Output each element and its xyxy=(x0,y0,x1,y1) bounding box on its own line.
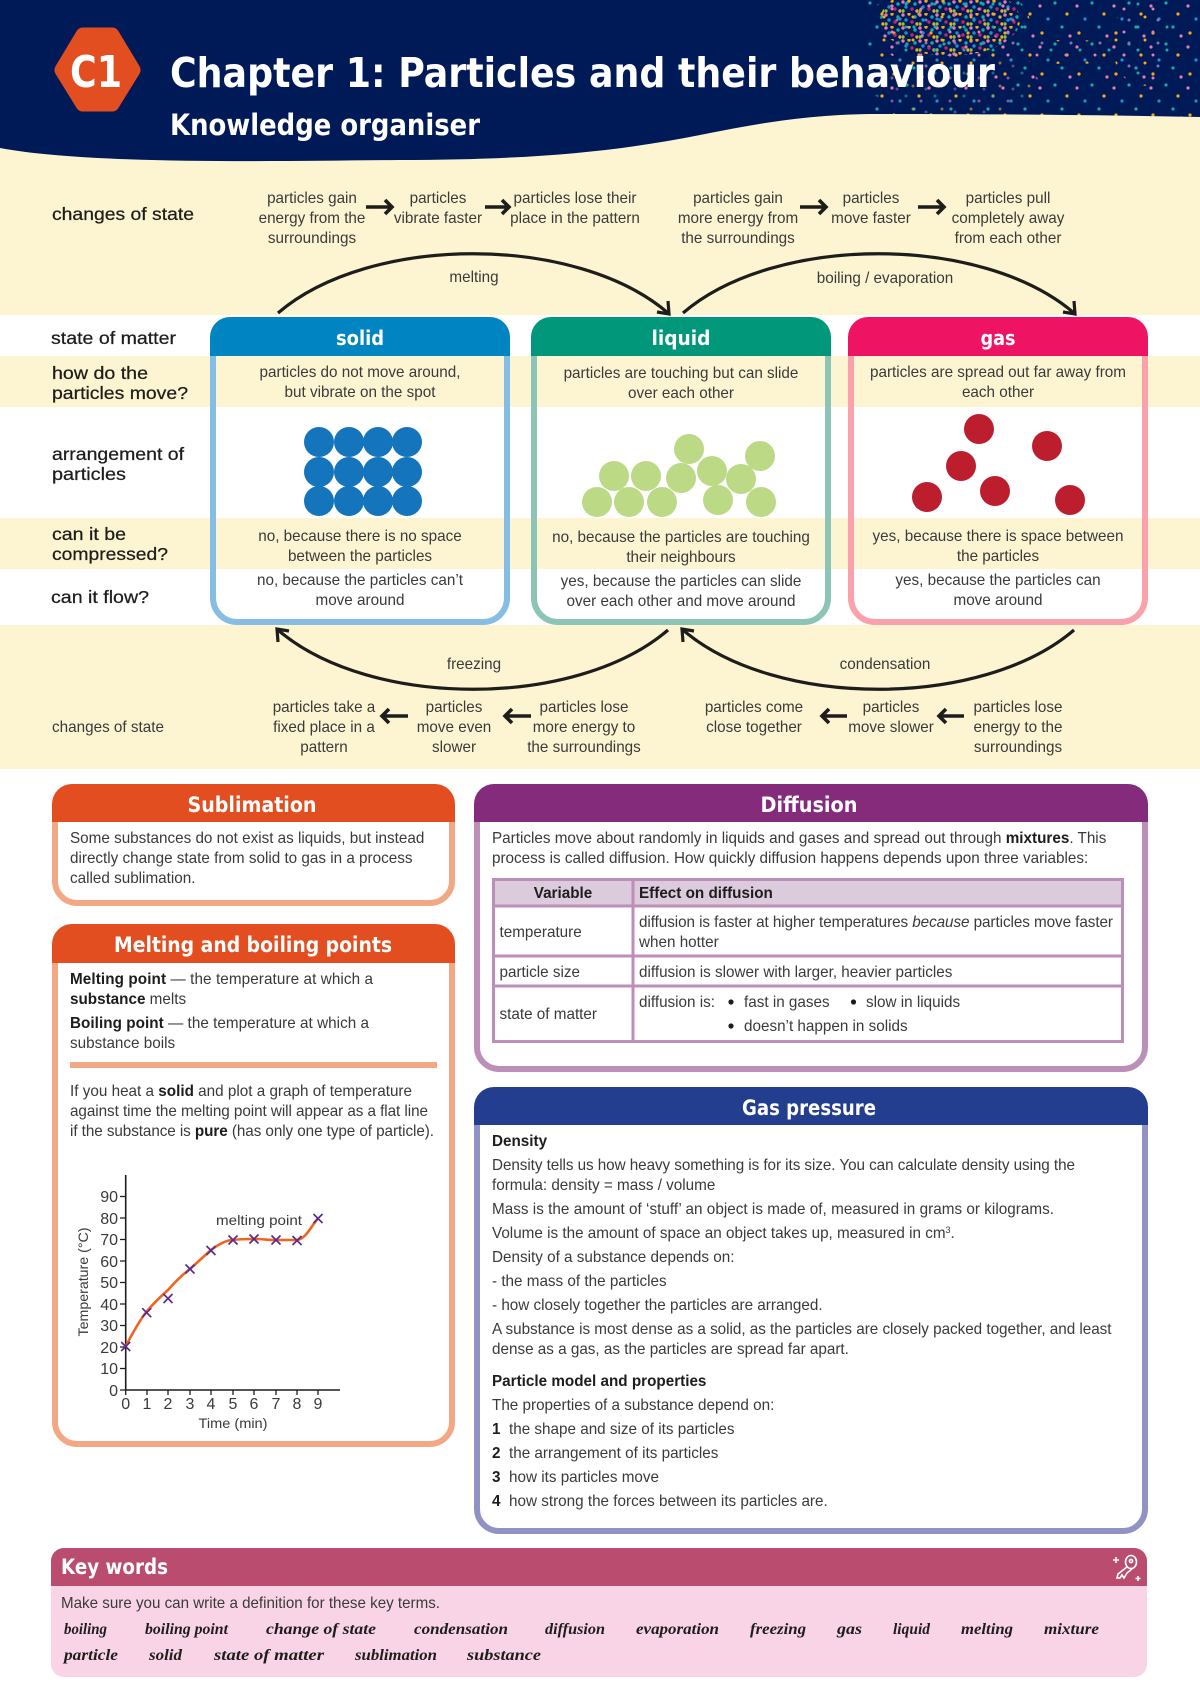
chapter badge C1: C1 xyxy=(70,47,122,98)
row labels: particles xyxy=(52,464,126,484)
key word list: freezing xyxy=(750,1621,806,1638)
panel: liquid xyxy=(531,317,831,622)
particle model text: 4 xyxy=(492,1493,501,1510)
panel: sublimation xyxy=(52,784,455,903)
heating process flow: particles xyxy=(843,190,900,207)
panel: solid: but vibrate on the spot xyxy=(285,384,436,401)
density text: - how closely together the particles are arranged. xyxy=(492,1297,823,1314)
density text: Density of a substance depends on: xyxy=(492,1249,734,1266)
density text: 3 xyxy=(946,1225,951,1235)
line chart: temperature against time: 40 xyxy=(100,1297,118,1314)
panel: gas pressure xyxy=(474,1087,1148,1531)
arrow: melting: melting xyxy=(449,269,499,286)
heating process flow: particles xyxy=(410,190,467,207)
cooling process flow: particles lose xyxy=(974,699,1062,716)
panel: gas: yes, because there is space between xyxy=(873,528,1123,545)
row labels: can it be xyxy=(52,524,126,544)
cooling process flow: fixed place in a xyxy=(273,719,375,736)
cooling process flow xyxy=(273,699,1063,756)
row label: changes of state: changes of state xyxy=(52,204,194,224)
heating process flow: place in the pattern xyxy=(510,210,640,227)
density text: Density tells us how heavy something is for its size. You can calculate density using the xyxy=(492,1157,1075,1174)
panel: gas: move around xyxy=(953,592,1043,609)
line chart: temperature against time: 50 xyxy=(100,1275,118,1292)
title: Chapter 1: Particles and their behaviour xyxy=(170,49,996,97)
panel: sublimation: directly change state from solid to gas in a process xyxy=(70,850,413,867)
particle model text: 1 xyxy=(492,1421,501,1438)
table: variables affecting diffusion: diffusion is: xyxy=(639,994,715,1011)
density text: formula: density = mass / volume xyxy=(492,1177,715,1194)
particle model text: the arrangement of its particles xyxy=(509,1445,719,1462)
line chart: temperature against time: 7 xyxy=(272,1396,281,1413)
definitions: Boiling point — the temperature at which a xyxy=(70,1015,370,1032)
row labels: compressed? xyxy=(52,544,168,564)
panel: key words xyxy=(51,1548,1147,1677)
panel: solid: solid xyxy=(336,326,384,350)
line chart: temperature against time: 8 xyxy=(293,1396,302,1413)
panel: gas: each other xyxy=(962,384,1034,401)
explanation text: if the substance is pure (has only one type of particle). xyxy=(70,1123,434,1140)
definitions: substance melts xyxy=(70,991,186,1008)
line chart: temperature against time: 3 xyxy=(186,1396,195,1413)
line chart: temperature against time: 60 xyxy=(100,1254,118,1271)
arrow: freezing xyxy=(277,629,668,689)
row labels: particles move? xyxy=(52,383,188,403)
particle model text: the shape and size of its particles xyxy=(509,1421,735,1438)
line chart: temperature against time: 1 xyxy=(143,1396,152,1413)
density text: A substance is most dense as a solid, as the particles are closely packed together, and least xyxy=(492,1321,1112,1338)
particle model text: how strong the forces between its particles are. xyxy=(509,1493,828,1510)
panel: gas: gas xyxy=(980,326,1016,350)
panel: solid: between the particles xyxy=(288,548,432,565)
key word list: change of state xyxy=(266,1621,376,1638)
line chart: temperature against time: Temperature (°C) xyxy=(75,1228,91,1336)
explanation text: If you heat a solid and plot a graph of temperature xyxy=(70,1083,412,1100)
table: variables affecting diffusion: Effect on diffusion xyxy=(639,885,773,902)
row label: changes of state (cooling): changes of state xyxy=(52,719,164,736)
arrow: boiling / evaporation xyxy=(683,254,1075,314)
table: variables affecting diffusion: doesn’t happen in solids xyxy=(744,1018,908,1035)
heating process flow: surroundings xyxy=(268,230,356,247)
panel: liquid: over each other xyxy=(628,385,734,402)
definitions: substance boils xyxy=(70,1035,175,1052)
key word list: boiling point xyxy=(145,1621,229,1638)
panel: gas: the particles xyxy=(957,548,1039,565)
panel: solid: move around xyxy=(315,592,405,609)
heating process flow: more energy from xyxy=(678,210,798,227)
panel: diffusion: Diffusion xyxy=(760,793,858,817)
heating process flow: move faster xyxy=(831,210,911,227)
particle model text: 2 xyxy=(492,1445,500,1462)
panel: solid: no, because there is no space xyxy=(258,528,462,545)
cooling process flow: move even xyxy=(417,719,491,736)
key word list: substance xyxy=(466,1647,541,1664)
table: variables affecting diffusion: fast in gases xyxy=(744,994,830,1011)
key word list: condensation xyxy=(414,1621,508,1638)
line chart: temperature against time: 2 xyxy=(164,1396,173,1413)
panel: sublimation: Some substances do not exist as liquids, but instead xyxy=(70,830,424,847)
heating process flow: vibrate faster xyxy=(394,210,482,227)
cooling process flow: particles lose xyxy=(540,699,628,716)
panel: liquid: yes, because the particles can slide xyxy=(561,573,801,590)
key word list: mixture xyxy=(1044,1621,1099,1638)
table: variables affecting diffusion: temperature xyxy=(500,924,582,941)
line chart: temperature against time: 0 xyxy=(121,1396,130,1413)
cooling process flow: particles take a xyxy=(273,699,376,716)
header banner xyxy=(0,0,1200,175)
panel: sublimation: called sublimation. xyxy=(70,870,195,887)
cooling process flow: particles xyxy=(863,699,920,716)
heating process flow: the surroundings xyxy=(681,230,795,247)
arrow: condensation: condensation xyxy=(840,656,930,673)
density text: Volume is the amount of space an object takes up, measured in cm xyxy=(492,1225,946,1242)
panel: gas: particles are spread out far away from xyxy=(870,364,1126,381)
table: variables affecting diffusion: particle size xyxy=(500,964,580,981)
line chart: temperature against time: 30 xyxy=(100,1318,118,1335)
panel: gas xyxy=(848,317,1148,622)
key word list: gas xyxy=(836,1621,862,1638)
heating process flow: energy from the xyxy=(259,210,365,227)
cream background bands xyxy=(0,114,1200,769)
arrow: boiling / evaporation: boiling / evaporation xyxy=(817,270,953,287)
line chart: temperature against time: 0 xyxy=(109,1383,118,1400)
arrow: melting xyxy=(278,254,669,314)
definitions xyxy=(70,971,374,1052)
key word list: boiling xyxy=(64,1621,107,1638)
cooling process flow: more energy to xyxy=(533,719,635,736)
explanation text xyxy=(70,1083,434,1140)
definitions: Melting point — the temperature at which a xyxy=(70,971,374,988)
key word list: solid xyxy=(148,1647,183,1664)
solid particles xyxy=(304,427,422,516)
panel: diffusion xyxy=(474,784,1148,1069)
key word list: liquid xyxy=(893,1621,931,1638)
density text: dense as a gas, as the particles are spread far apart. xyxy=(492,1341,849,1358)
panel: key words: Key words xyxy=(61,1555,168,1579)
icon: key xyxy=(1113,1556,1140,1581)
panel: solid xyxy=(210,317,510,622)
table: variables affecting diffusion: state of matter xyxy=(500,1006,597,1023)
table: variables affecting diffusion: when hotter xyxy=(638,934,719,951)
panel: liquid: their neighbours xyxy=(626,549,736,566)
line chart: temperature against time: 10 xyxy=(100,1361,118,1378)
cooling process flow: move slower xyxy=(848,719,934,736)
chapter badge C1 xyxy=(62,35,133,104)
key word list: particle xyxy=(62,1647,118,1664)
heating process flow: from each other xyxy=(955,230,1061,247)
panel: sublimation: Sublimation xyxy=(188,793,316,817)
table: variables affecting diffusion xyxy=(494,880,1122,1042)
line chart: temperature against time: 80 xyxy=(100,1211,118,1228)
arrow: condensation xyxy=(682,629,1074,689)
line chart: temperature against time: Time (min) xyxy=(198,1415,268,1431)
row labels: can it flow? xyxy=(51,587,149,607)
particle model text: how its particles move xyxy=(509,1469,659,1486)
key word list: melting xyxy=(961,1621,1013,1638)
panel: liquid: particles are touching but can slide xyxy=(564,365,798,382)
density text: - the mass of the particles xyxy=(492,1273,667,1290)
key word list: state of matter xyxy=(213,1647,325,1664)
subtitle: Knowledge organiser xyxy=(170,108,480,142)
key word list: diffusion xyxy=(545,1621,605,1638)
line chart: temperature against time: 70 xyxy=(100,1232,118,1249)
cooling process flow: the surroundings xyxy=(527,739,641,756)
cooling process flow: particles come xyxy=(705,699,803,716)
cooling process flow: particles xyxy=(426,699,483,716)
row labels: state of matter xyxy=(51,328,176,348)
density text xyxy=(492,1133,1112,1358)
line chart: temperature against time: 6 xyxy=(250,1396,259,1413)
heating process flow xyxy=(259,190,1065,247)
cooling process flow: surroundings xyxy=(974,739,1062,756)
key word list: sublimation xyxy=(354,1647,437,1664)
panel: key words: Make sure you can write a definition for these key terms. xyxy=(61,1595,440,1612)
liquid particles xyxy=(582,434,776,517)
heating process flow: completely away xyxy=(952,210,1065,227)
panel: liquid: no, because the particles are touching xyxy=(552,529,810,546)
panel: liquid: liquid xyxy=(652,326,710,350)
panel: liquid: over each other and move around xyxy=(567,593,795,610)
table: variables affecting diffusion: diffusion is faster at higher temperatures because particles move faster xyxy=(639,914,1113,931)
density text: . xyxy=(951,1225,955,1242)
table: variables affecting diffusion: slow in liquids xyxy=(866,994,960,1011)
arrow: freezing: freezing xyxy=(447,656,501,673)
heating process flow: particles pull xyxy=(966,190,1050,207)
density text: Mass is the amount of ‘stuff’ an object is made of, measured in grams or kilograms. xyxy=(492,1201,1054,1218)
particle model text: Particle model and properties xyxy=(492,1373,706,1390)
cooling process flow: pattern xyxy=(300,739,348,756)
table: variables affecting diffusion: diffusion is slower with larger, heavier particles xyxy=(639,964,953,981)
panel: melting and boiling points xyxy=(52,924,455,1444)
line chart: temperature against time: melting point xyxy=(216,1212,302,1228)
line chart: temperature against time: 5 xyxy=(229,1396,238,1413)
explanation text: against time the melting point will appear as a flat line xyxy=(70,1103,428,1120)
particle model text: 3 xyxy=(492,1469,500,1486)
panel: gas pressure: Gas pressure xyxy=(742,1096,876,1120)
density text: Density xyxy=(492,1133,548,1150)
panel: solid: particles do not move around, xyxy=(260,364,460,381)
line chart: temperature against time: 9 xyxy=(314,1396,323,1413)
row labels: how do the xyxy=(52,363,148,383)
gas particles xyxy=(912,414,1085,515)
key word list: evaporation xyxy=(636,1621,719,1638)
particle model text: The properties of a substance depend on: xyxy=(492,1397,774,1414)
row labels xyxy=(51,328,188,607)
heating process flow: particles lose their xyxy=(514,190,636,207)
particle model text xyxy=(492,1373,828,1510)
heating process flow: particles gain xyxy=(267,190,357,207)
key word list xyxy=(62,1621,1099,1664)
cooling process flow: close together xyxy=(706,719,802,736)
row labels: arrangement of xyxy=(52,444,184,464)
table: variables affecting diffusion: Variable xyxy=(534,885,592,902)
line chart: temperature against time: 4 xyxy=(207,1396,216,1413)
panel: gas: yes, because the particles can xyxy=(895,572,1101,589)
panel: solid: no, because the particles can’t xyxy=(257,572,464,589)
panel: diffusion: process is called diffusion. How quickly diffusion happens depends upon three variables: xyxy=(492,850,1088,867)
panel: diffusion: Particles move about randomly in liquids and gases and spread out through mixtures. This xyxy=(492,830,1107,847)
heating process flow: particles gain xyxy=(693,190,783,207)
panel: melting and boiling points: Melting and boiling points xyxy=(114,933,392,957)
cooling process flow: slower xyxy=(432,739,476,756)
line chart: temperature against time: 90 xyxy=(100,1189,118,1206)
cooling process flow: energy to the xyxy=(973,719,1063,736)
line chart: temperature against time xyxy=(75,1175,340,1431)
line chart: temperature against time: 20 xyxy=(100,1340,118,1357)
